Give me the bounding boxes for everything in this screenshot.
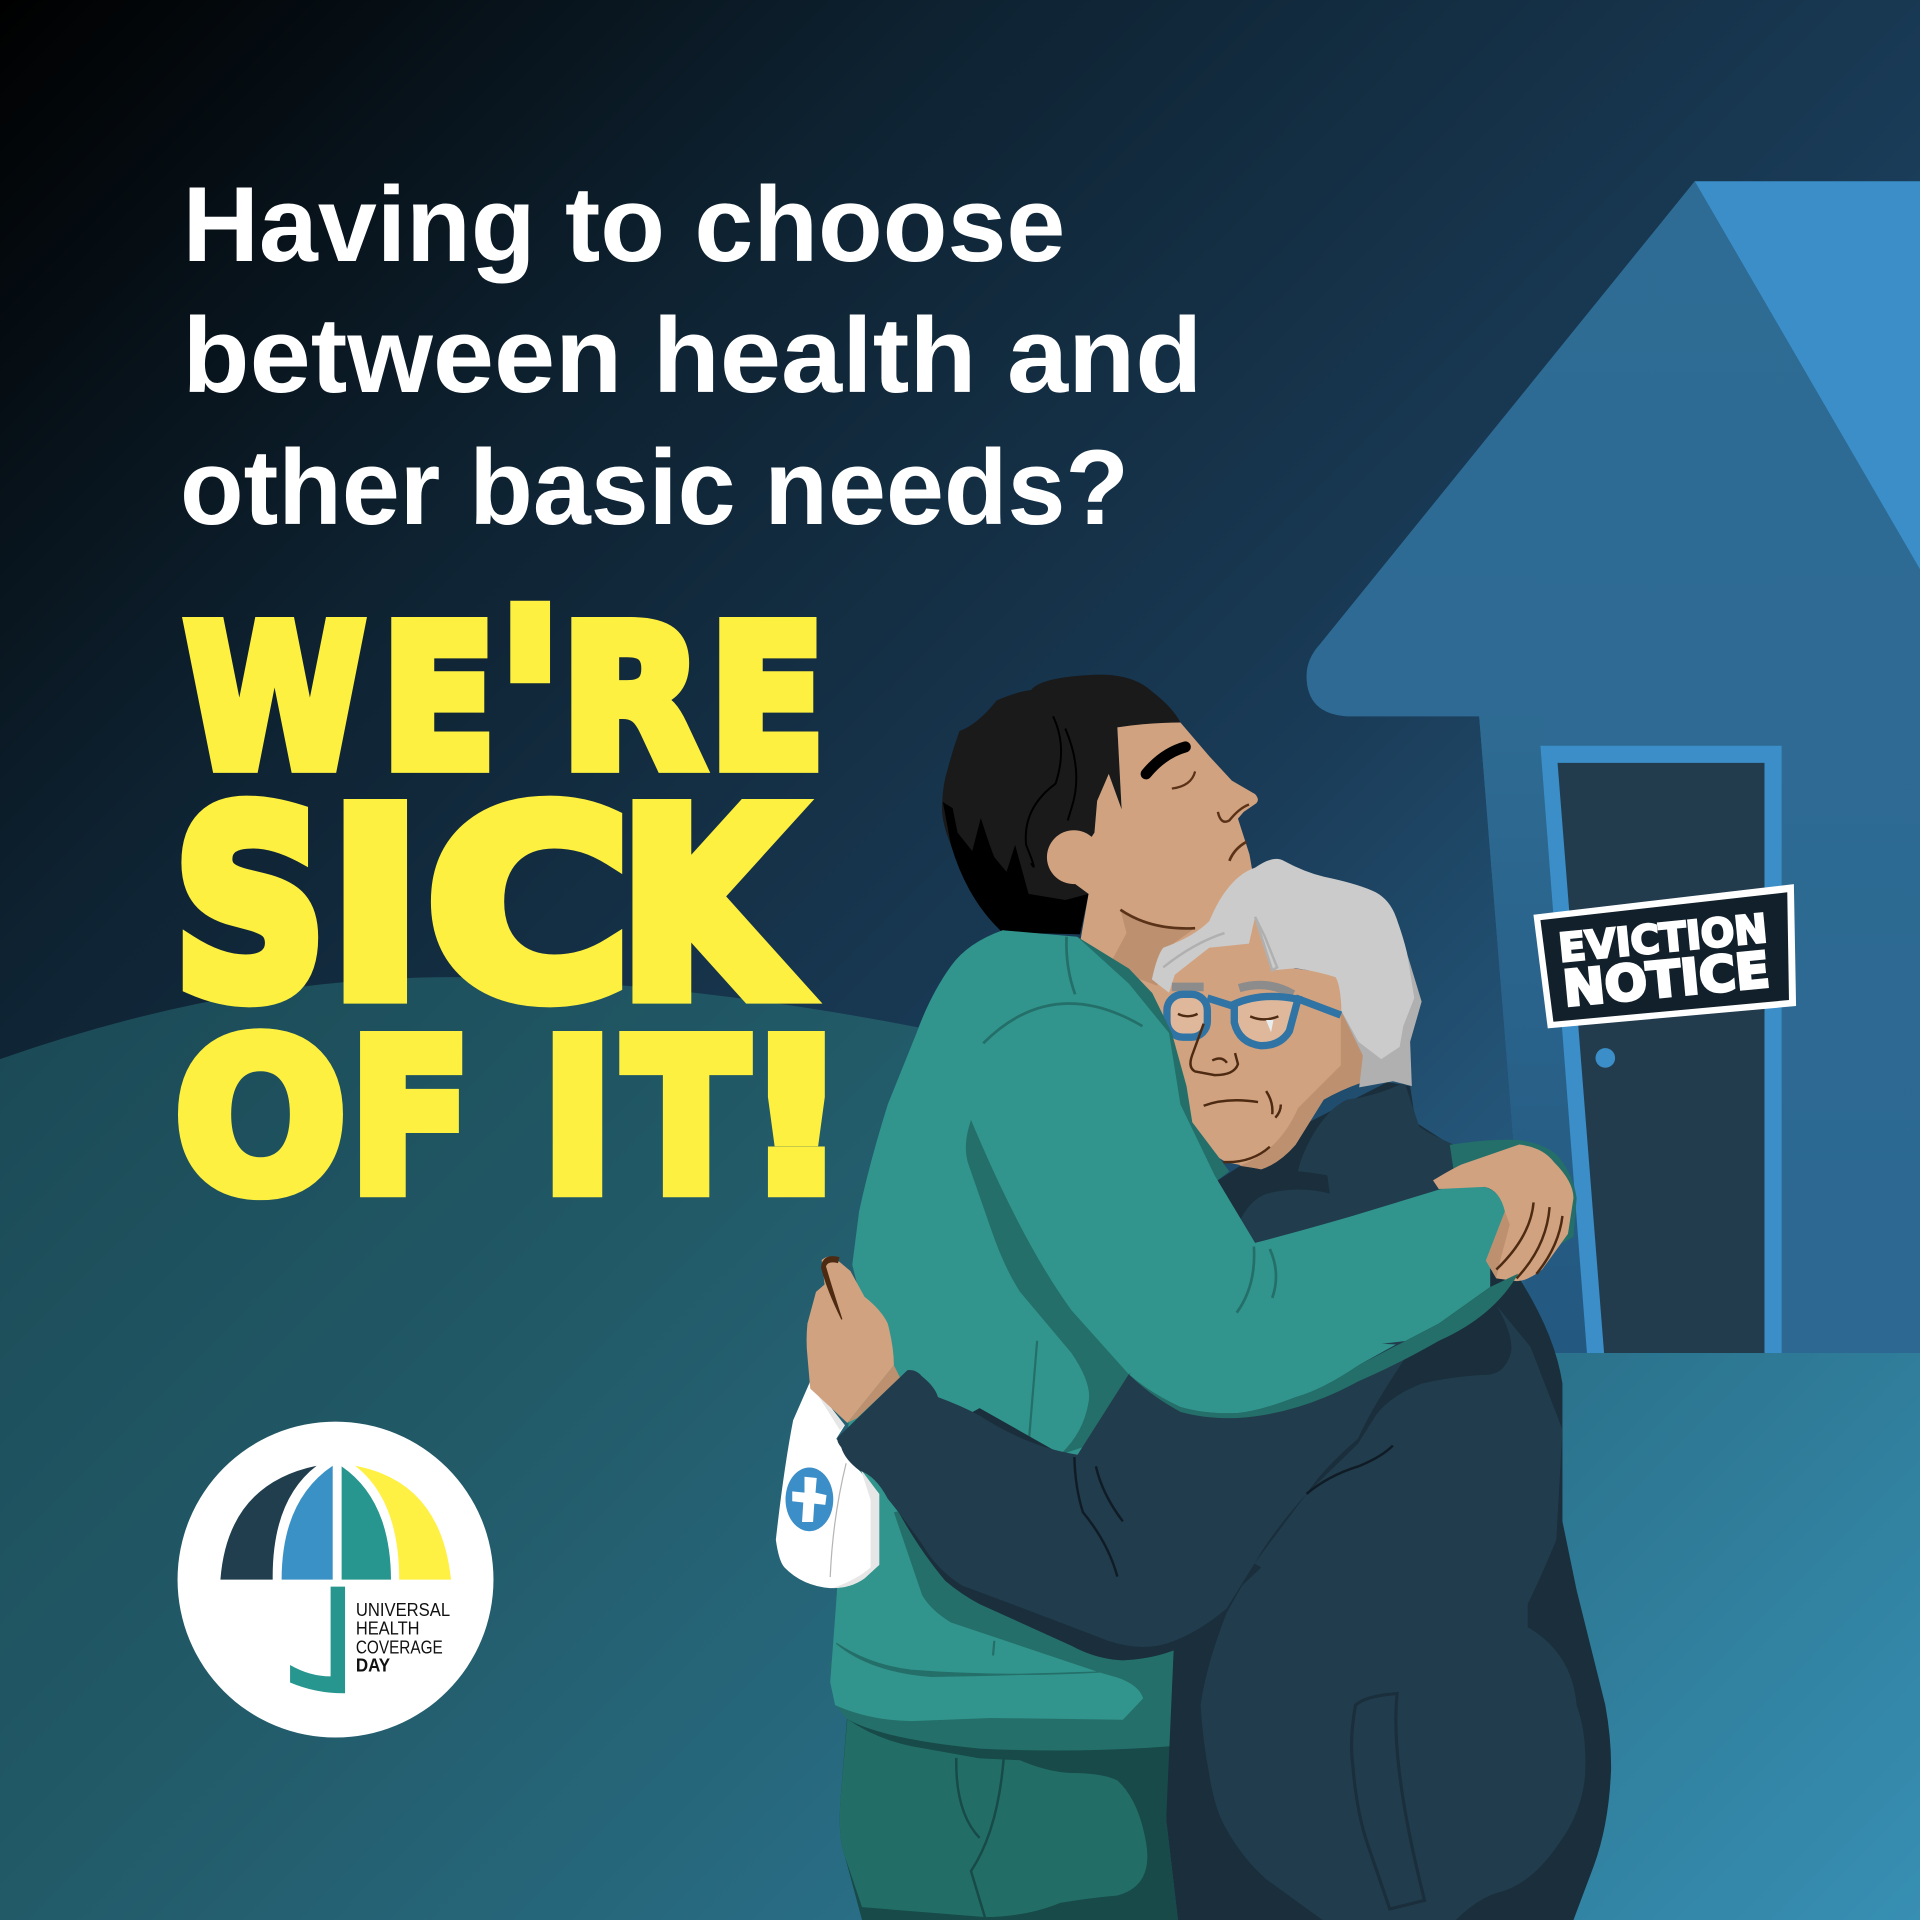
woman's face details (1178, 1014, 1281, 1162)
medicine bottle (776, 1381, 879, 1588)
headline: We're sick of it!: R (561, 586, 704, 813)
elderly woman's head and hair (1152, 859, 1422, 1169)
heading: other basic needs? (180, 428, 1129, 547)
eviction notice sign (1533, 884, 1796, 1028)
headline: We're sick of it!: I (541, 997, 613, 1240)
heading: Having to choose (182, 165, 1065, 284)
house (1307, 181, 1920, 1353)
heading: between health and (182, 296, 1202, 415)
headline: We're sick of it!: ! (743, 997, 849, 1240)
left hand holding bottle (807, 1257, 900, 1423)
door (1540, 746, 1782, 1353)
headline: We're sick of it!: E (710, 586, 825, 813)
coat pocket (1352, 1693, 1425, 1909)
headline: We're sick of it!: S (174, 758, 326, 1056)
tear (1266, 1020, 1273, 1032)
young man's head and hair (942, 675, 1258, 1016)
logo: Universal Health Coverage Day: DAY (356, 1654, 391, 1675)
arm creases (983, 937, 1276, 1313)
headline: We're sick of it!: T (624, 997, 747, 1240)
sleeve creases (1074, 1446, 1393, 1577)
eviction notice sign: NOTICE (1561, 941, 1772, 1018)
logo: Universal Health Coverage Day: HEALTH (356, 1618, 420, 1639)
headline: We're sick of it!: F (350, 997, 471, 1240)
headline: We're sick of it!: K (620, 758, 796, 1056)
logo: Universal Health Coverage Day: COVERAGE (356, 1636, 443, 1657)
young man's embracing arm (882, 930, 1577, 1455)
headline: We're sick of it!: E (382, 586, 496, 813)
young man's green jacket torso (830, 930, 1176, 1751)
woman's arm around the man (837, 1273, 1518, 1660)
headline: We're sick of it! (174, 562, 849, 1240)
logo: Universal Health Coverage Day (178, 1422, 493, 1738)
headline: We're sick of it!: I (330, 758, 421, 1056)
elderly woman's coat (1166, 1082, 1611, 1920)
logo: Universal Health Coverage Day: UNIVERSAL (356, 1599, 450, 1620)
woman's eyebrows (1172, 985, 1293, 994)
woman's glasses (1167, 994, 1341, 1046)
headline: We're sick of it!: C (427, 758, 630, 1056)
hill and ground (0, 977, 1920, 1920)
heading (180, 165, 1202, 547)
headline: We're sick of it!: O (175, 997, 346, 1240)
headline: We're sick of it!: ' (497, 562, 563, 844)
headline: We're sick of it!: W (184, 586, 365, 813)
eviction notice sign: EVICTION (1557, 907, 1769, 972)
young man's trousers (840, 1714, 1178, 1920)
right hand on woman's back (1433, 1145, 1573, 1281)
